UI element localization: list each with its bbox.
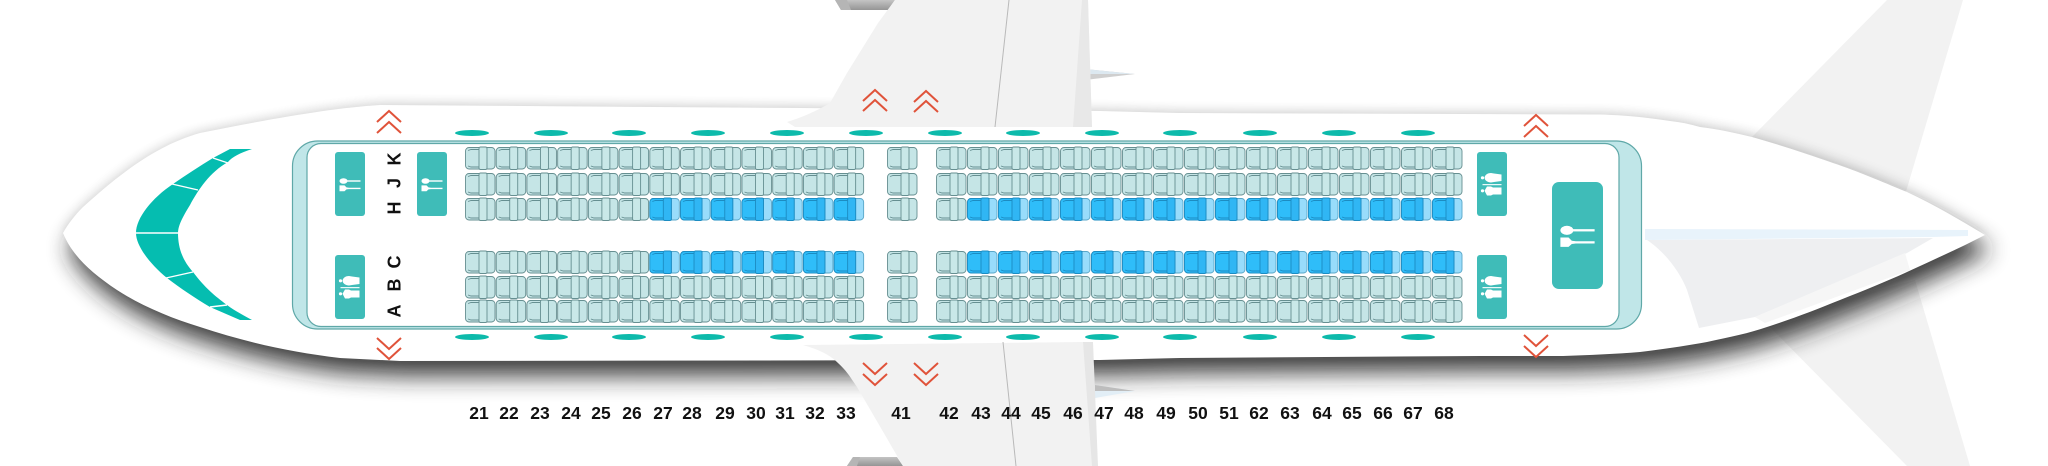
arrow: wing exit 1 down [863, 363, 887, 385]
row numbers: 67 [1403, 403, 1423, 423]
galley: front right [417, 152, 447, 216]
arrow: wing exit 2 up [914, 91, 938, 112]
row numbers: 43 [971, 403, 991, 423]
row numbers: 50 [1188, 403, 1208, 423]
seat column letters: A [384, 304, 404, 318]
lower wing [803, 342, 1135, 466]
row numbers: 48 [1124, 403, 1144, 423]
arrow: front door down [377, 338, 401, 359]
seats: section rows 42-68 [936, 147, 1462, 322]
lavatory: rear upper [1477, 152, 1507, 216]
seats: section rows 21-33 [466, 147, 864, 322]
row numbers: 25 [591, 403, 611, 423]
row numbers: 42 [939, 403, 959, 423]
row numbers: 46 [1063, 403, 1083, 423]
vertical tail fin [1645, 229, 1968, 328]
cabin outline [292, 141, 1642, 329]
seat column letters [384, 152, 404, 318]
galley: front left [335, 152, 365, 216]
seat column letters: J [384, 178, 404, 188]
row numbers: 41 [891, 403, 911, 423]
row numbers: 27 [653, 403, 673, 423]
row numbers: 47 [1094, 403, 1114, 423]
row numbers: 63 [1280, 403, 1300, 423]
fuselage shadow [69, 120, 1991, 376]
row numbers: 22 [499, 403, 519, 423]
arrow: wing exit 1 up [863, 90, 887, 111]
arrow: rear door up [1524, 115, 1548, 137]
seat column letters: K [384, 152, 404, 166]
row numbers: 33 [836, 403, 856, 423]
seat column letters: H [384, 202, 404, 214]
row numbers: 24 [561, 403, 581, 423]
row numbers: 45 [1031, 403, 1051, 423]
row numbers: 62 [1249, 403, 1269, 423]
row numbers: 28 [682, 403, 702, 423]
cockpit windshield [136, 149, 252, 320]
seat column letters: B [384, 278, 404, 292]
row numbers: 66 [1373, 403, 1393, 423]
arrow: rear door down [1524, 335, 1548, 357]
row numbers: 44 [1001, 403, 1021, 423]
fuselage top soft edge [63, 101, 1985, 357]
row numbers: 30 [746, 403, 766, 423]
fuselage body [63, 105, 1985, 361]
galley: rear [1552, 182, 1603, 289]
seats: exit row 41 [888, 147, 917, 322]
upper wing [787, 0, 1135, 127]
exit arrows [377, 90, 1548, 385]
windows: upper row [455, 130, 1435, 136]
row numbers: 21 [469, 403, 489, 423]
row numbers: 64 [1312, 403, 1332, 423]
tail stabilizers [1752, 0, 1970, 466]
seat column letters: C [384, 256, 404, 268]
row numbers: 26 [622, 403, 642, 423]
row numbers: 51 [1219, 403, 1239, 423]
row numbers: 31 [775, 403, 795, 423]
row numbers: 65 [1342, 403, 1362, 423]
row numbers: 29 [715, 403, 735, 423]
row numbers [469, 403, 1454, 423]
arrow: front door up [377, 111, 401, 133]
windows: lower row [455, 334, 1435, 340]
lavatory: front [335, 255, 365, 319]
row numbers: 49 [1156, 403, 1176, 423]
row numbers: 68 [1434, 403, 1454, 423]
row numbers: 23 [530, 403, 550, 423]
row numbers: 32 [805, 403, 825, 423]
lavatory: rear lower [1477, 255, 1507, 319]
arrow: wing exit 2 down [914, 363, 938, 385]
